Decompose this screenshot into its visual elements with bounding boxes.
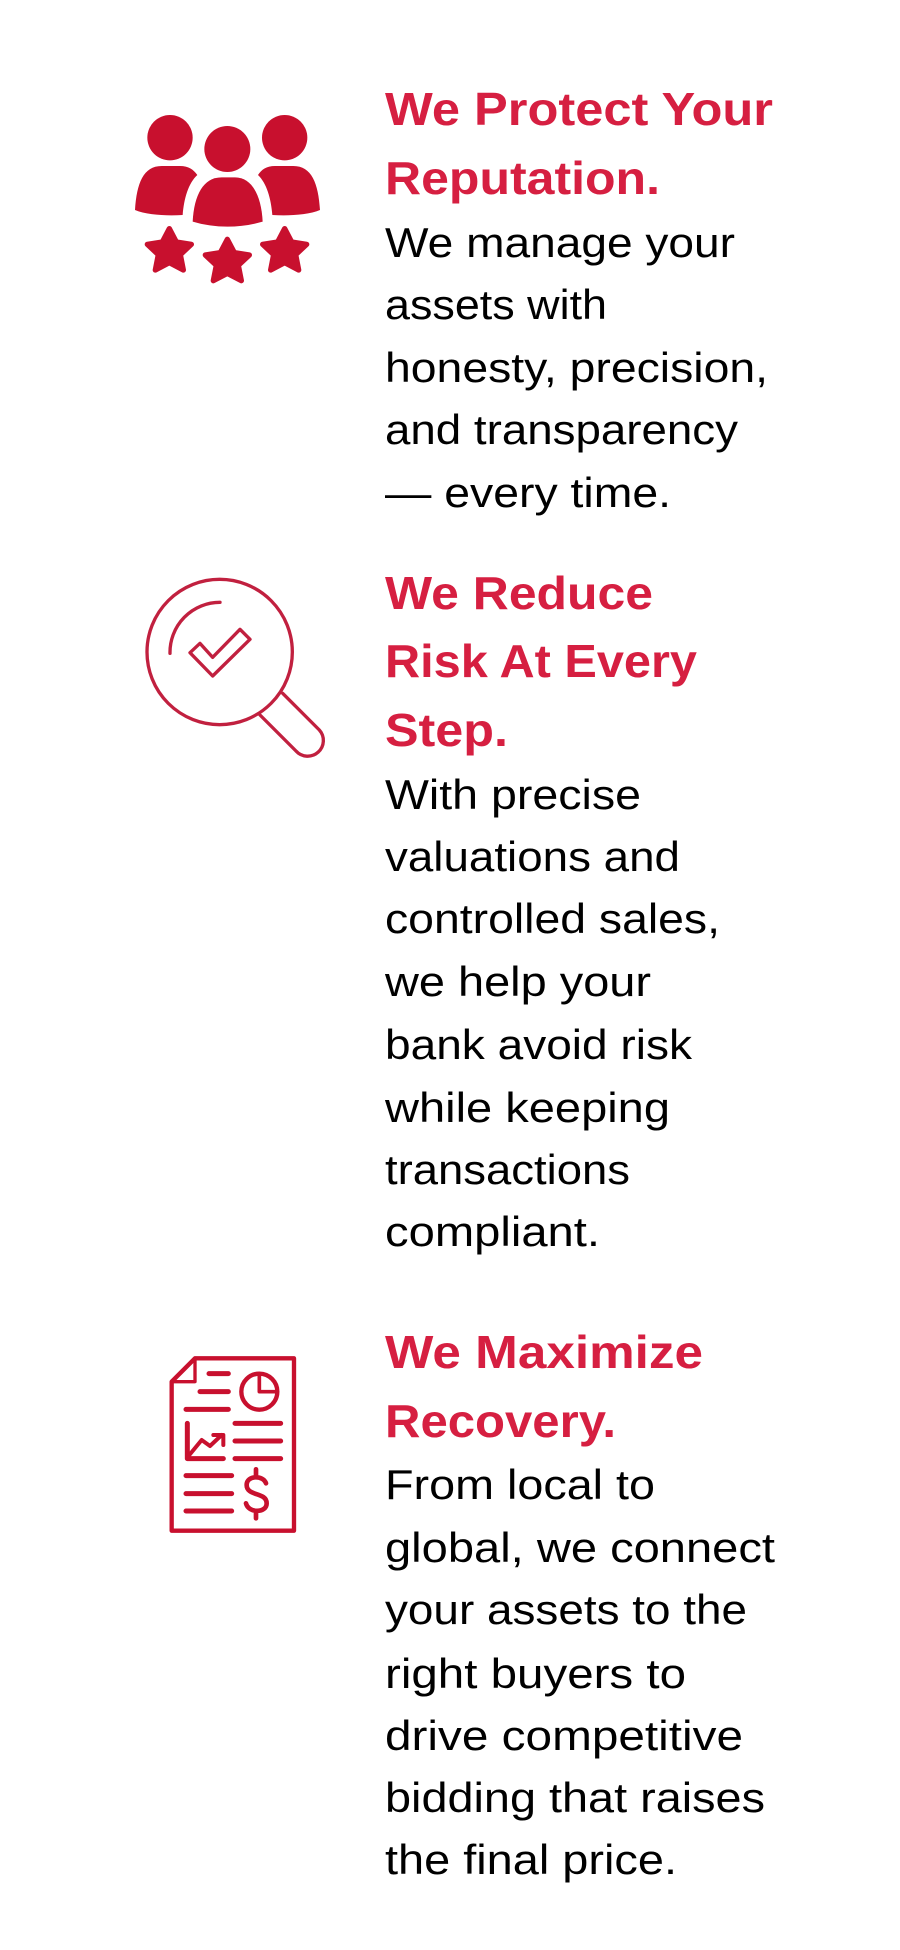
panel: protect your reputation <box>135 83 773 516</box>
heading: We Protect Your Reputation <box>385 83 773 204</box>
text block: recovery description: From local to <box>385 1461 655 1508</box>
text block: reputation description: We manage your <box>385 219 735 266</box>
text block: reputation description: honesty, precision, <box>385 344 768 391</box>
heading: We Reduce Risk At Every Step <box>385 567 697 756</box>
heading: We Protect Your Reputation: Reputation. <box>385 152 660 204</box>
text block: risk description: bank avoid risk <box>385 1021 693 1068</box>
text block: risk description: while keeping <box>384 1084 670 1131</box>
heading: We Reduce Risk At Every Step: Risk At Every <box>385 635 697 687</box>
heading: We Maximize Recovery: We Maximize <box>385 1326 703 1378</box>
heading: We Protect Your Reputation: We Protect Your <box>385 83 773 135</box>
text block: reputation description: — every time. <box>385 469 671 516</box>
heading: We Reduce Risk At Every Step: Step. <box>385 704 508 756</box>
icon: magnifying glass with check mark <box>147 579 323 756</box>
text block: recovery description <box>385 1461 775 1883</box>
text block: risk description <box>384 771 720 1255</box>
heading: We Maximize Recovery <box>385 1326 703 1447</box>
text block: risk description: controlled sales, <box>385 895 720 942</box>
heading: We Maximize Recovery: Recovery. <box>385 1395 616 1447</box>
text block: risk description: With precise <box>385 771 641 818</box>
icon: three people with stars <box>135 115 320 281</box>
text block: reputation description: and transparency <box>385 406 738 453</box>
text block: risk description: we help your <box>384 958 651 1005</box>
text block: reputation description: assets with <box>385 281 607 328</box>
text block: recovery description: right buyers to <box>385 1650 686 1697</box>
text block: risk description: valuations and <box>385 833 680 880</box>
text block: recovery description: the final price. <box>385 1836 677 1883</box>
text block: recovery description: global, we connect <box>385 1524 775 1571</box>
text block: reputation description <box>385 219 768 516</box>
text block: recovery description: bidding that raises <box>385 1774 765 1821</box>
text block: risk description: compliant. <box>385 1208 600 1255</box>
text block: recovery description: drive competitive <box>385 1712 743 1759</box>
text block: risk description: transactions <box>385 1146 630 1193</box>
panel: maximize recovery <box>172 1326 775 1883</box>
panel: reduce risk <box>147 567 720 1255</box>
heading: We Reduce Risk At Every Step: We Reduce <box>385 567 653 619</box>
text block: recovery description: your assets to the <box>385 1586 747 1633</box>
icon: financial report document <box>172 1358 294 1531</box>
